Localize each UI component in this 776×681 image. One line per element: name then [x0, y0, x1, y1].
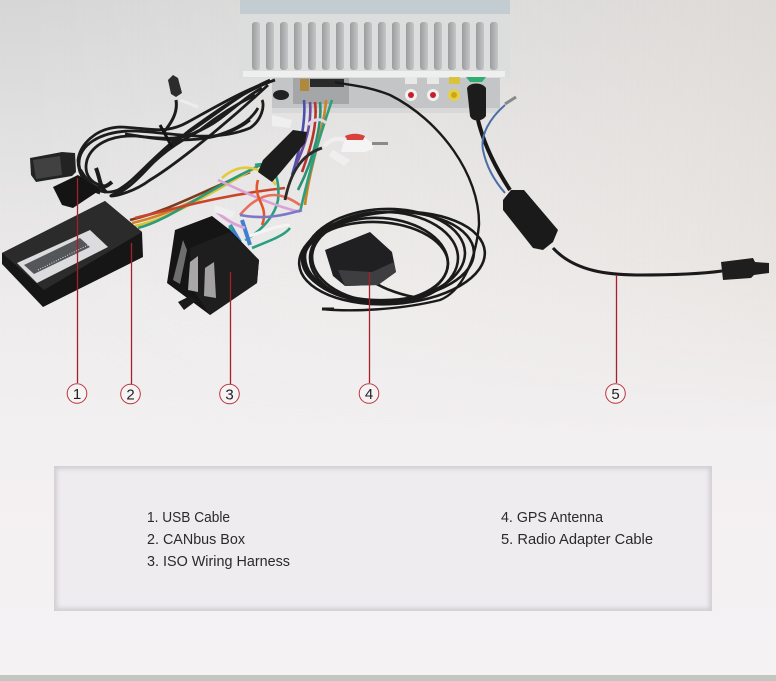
- callout number 4: 4: [365, 386, 373, 403]
- ISO wiring harness loom: [215, 100, 332, 248]
- USB connectors: [30, 152, 100, 208]
- head unit rear: [239, 0, 510, 113]
- callout line 1: [67, 178, 87, 403]
- GPS antenna cable coil: [296, 82, 488, 310]
- legend item 4: 4. GPS Antenna: [501, 509, 604, 526]
- legend item 2: 2. CANbus Box: [147, 531, 245, 548]
- callout number 1: 1: [73, 386, 81, 403]
- CANbus box: [2, 201, 143, 307]
- legend item 1: 1. USB Cable: [147, 509, 230, 526]
- legend item 3: 3. ISO Wiring Harness: [147, 553, 290, 570]
- legend item 5: 5. Radio Adapter Cable: [501, 531, 653, 548]
- callout number 2: [121, 384, 140, 404]
- radio adapter cable: [467, 84, 769, 280]
- callout line 3: [220, 272, 239, 404]
- callout line 5: [606, 275, 625, 403]
- photo background: [0, 0, 776, 374]
- bottom band: [0, 675, 776, 681]
- coiled USB cable bundle: [78, 80, 275, 196]
- GPS antenna puck: [325, 232, 396, 286]
- callout number 1: [67, 384, 87, 403]
- RCA plugs: [324, 134, 388, 152]
- callout number 3: 3: [225, 386, 234, 404]
- callout line 2: [121, 243, 140, 404]
- cable zip tie and small plug: [160, 75, 198, 147]
- CANbus wires: [130, 163, 285, 228]
- ISO connector: [167, 216, 259, 315]
- callout line 4: [359, 272, 379, 403]
- callout number 2: 2: [126, 386, 135, 404]
- harness sleeve and labels: [214, 115, 350, 218]
- callout number 5: 5: [611, 386, 620, 403]
- legend panel: [54, 466, 712, 611]
